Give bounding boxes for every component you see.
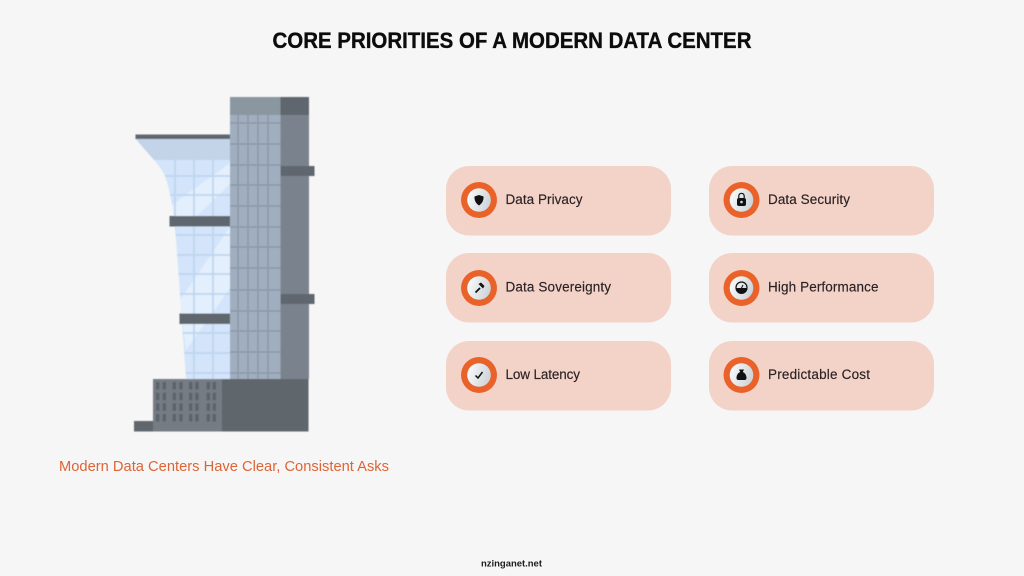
label: Data Privacy xyxy=(506,192,583,207)
icon: gauge xyxy=(724,270,760,306)
icon: padlock xyxy=(724,182,760,218)
footer website: nzinganet.net xyxy=(481,558,543,570)
card: High Performance xyxy=(709,253,934,322)
icon: check mark xyxy=(461,357,497,393)
label: Data Sovereignty xyxy=(506,280,611,294)
tagline: Modern Data Centers Have Clear, Consistent Asks xyxy=(59,459,389,475)
label: Low Latency xyxy=(506,367,580,382)
icon: shield xyxy=(461,182,497,218)
central tower xyxy=(230,97,281,379)
roof slab xyxy=(136,134,230,139)
icon: gavel xyxy=(461,270,497,306)
card: Data Security xyxy=(709,166,934,236)
card: Low Latency xyxy=(446,341,671,410)
lower ledge xyxy=(180,314,230,324)
card: Data Privacy xyxy=(446,166,671,236)
glass wing xyxy=(130,139,230,379)
label: Predictable Cost xyxy=(768,367,870,382)
right column xyxy=(280,97,314,379)
label: High Performance xyxy=(768,280,878,294)
title: CORE PRIORITIES OF A MODERN DATA CENTER xyxy=(272,28,752,53)
card: Predictable Cost xyxy=(709,341,934,410)
label: Data Security xyxy=(768,192,850,207)
upper ledge xyxy=(170,216,230,226)
icon: money bag xyxy=(724,357,760,393)
podium xyxy=(134,379,308,432)
card: Data Sovereignty xyxy=(446,253,671,322)
illustration: data center building xyxy=(130,97,314,432)
